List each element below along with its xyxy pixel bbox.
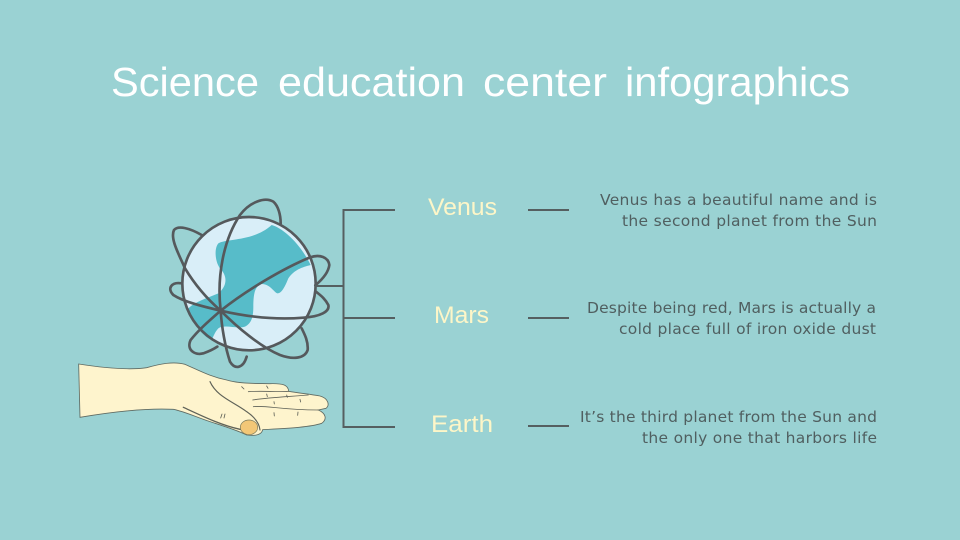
hand creases bbox=[183, 382, 318, 430]
description: Earth: It’s the third planet from the Sun and bbox=[580, 408, 877, 426]
dash: Mars bbox=[528, 317, 569, 319]
label: Mars: Mars bbox=[434, 302, 489, 329]
description: Mars bbox=[587, 299, 876, 338]
thumbnail bbox=[240, 420, 258, 435]
row: Venus bbox=[428, 191, 877, 230]
title: Science bbox=[111, 59, 259, 105]
hand shape bbox=[79, 363, 328, 435]
description: Mars: Despite being red, Mars is actually a bbox=[587, 299, 876, 317]
title bbox=[111, 59, 850, 105]
description: Earth bbox=[580, 408, 877, 447]
description: Mars: cold place full of iron oxide dust bbox=[619, 320, 876, 338]
title: infographics bbox=[625, 59, 850, 105]
description: Venus: Venus has a beautiful name and is bbox=[600, 191, 877, 209]
globe continent bbox=[188, 225, 311, 340]
title: education bbox=[278, 59, 465, 105]
connector bracket bbox=[315, 210, 395, 427]
label: Earth: Earth bbox=[431, 411, 493, 438]
row: Earth bbox=[431, 408, 877, 447]
label: Venus: Venus bbox=[428, 194, 497, 221]
row: Mars bbox=[434, 299, 876, 338]
title: center bbox=[483, 59, 607, 105]
illustration: globe bbox=[170, 200, 329, 367]
illustration: open hand bbox=[79, 363, 328, 435]
description: Earth: the only one that harbors life bbox=[642, 429, 877, 447]
dash: Earth bbox=[528, 425, 569, 427]
description: Venus: the second planet from the Sun bbox=[622, 212, 877, 230]
dash: Venus bbox=[528, 209, 569, 211]
globe sphere bbox=[182, 217, 316, 350]
globe orbits bbox=[170, 200, 329, 367]
description: Venus bbox=[600, 191, 877, 230]
